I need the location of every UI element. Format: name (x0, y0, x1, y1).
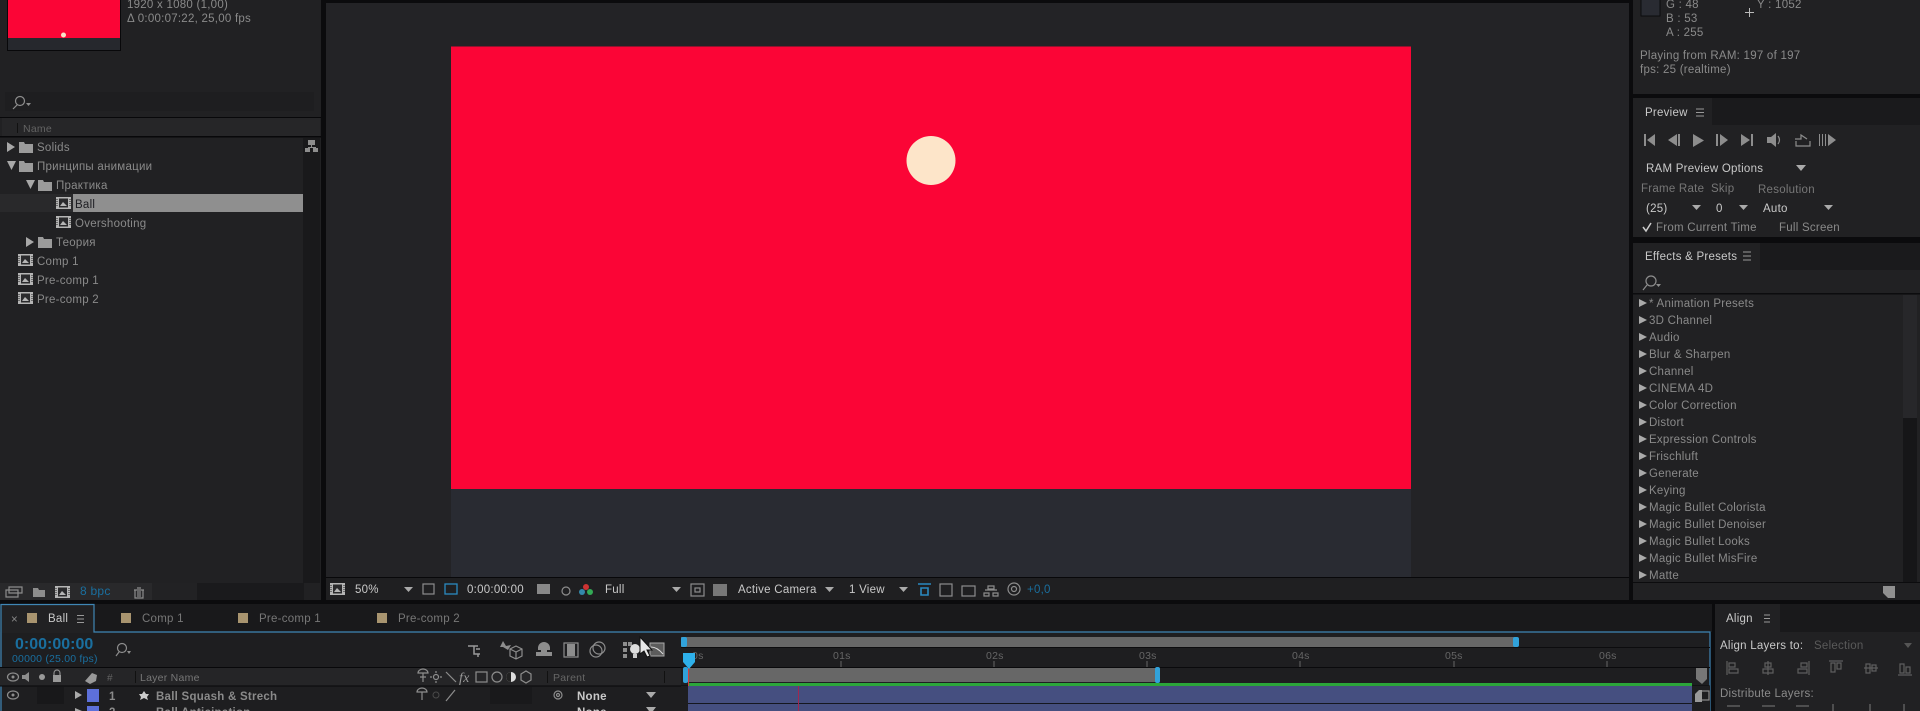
panel: info: B : 53 (1666, 13, 1698, 25)
panel: preview: Frame Rate (1641, 183, 1704, 195)
timeline tab: Ball: Ball (48, 613, 68, 625)
right timeline controls (1695, 668, 1709, 702)
panel: timeline (0, 604, 1712, 711)
panel: project (0, 0, 321, 600)
panel: align (1715, 604, 1920, 711)
layer row 1 (8, 687, 656, 704)
project tree list: Overshooting (75, 218, 146, 230)
layer row 1: Ball Squash & Strech (156, 691, 277, 703)
flowchart icon (305, 140, 318, 152)
layer duration bars (681, 667, 1710, 711)
playback controls (1644, 133, 1836, 147)
effects list: Distort (1649, 417, 1685, 429)
layer row 2 (75, 706, 656, 711)
panel: align: Align Layers to: (1720, 640, 1803, 652)
project tree list: Pre-comp 2 (37, 294, 99, 306)
distribute icons (1727, 704, 1904, 711)
panel: effects and presets (1633, 243, 1920, 600)
panel: preview: (25) (1646, 203, 1667, 215)
panel: align: Distribute Layers: (1720, 688, 1814, 700)
time ruler (681, 647, 1710, 667)
project search box (5, 92, 314, 111)
panel: preview: Preview (1645, 107, 1688, 119)
effects list: Audio (1649, 332, 1680, 344)
panel: preview: Auto (1763, 203, 1788, 215)
time ruler: 03s (1139, 650, 1157, 662)
panel: preview: Resolution (1758, 184, 1815, 196)
effects list (1639, 298, 1766, 582)
effects list: Magic Bullet Looks (1649, 536, 1750, 548)
layer row 1: 1 (109, 691, 116, 703)
effects list: * Animation Presets (1649, 298, 1754, 310)
timeline search (116, 644, 131, 656)
time ruler: 04s (1292, 650, 1310, 662)
project column header: Name (23, 123, 52, 135)
layer header row: fx (459, 671, 470, 686)
project item info (127, 0, 251, 25)
selected row: Ball (0, 194, 303, 212)
timeline tab: Ball (1, 604, 1710, 711)
playhead (683, 653, 695, 669)
mouse cursor (640, 637, 652, 657)
panel: preview: RAM Preview Options (1646, 163, 1763, 175)
panel: preview: 0 (1716, 203, 1723, 215)
layer row 1: None (577, 691, 607, 703)
effects list: Magic Bullet Denoiser (1649, 519, 1766, 531)
effects list: Blur & Sharpen (1649, 349, 1730, 361)
layer header row: Layer Name (140, 672, 200, 684)
layer header row: # (107, 673, 113, 684)
panel: preview: From Current Time (1656, 222, 1757, 234)
effects list: Magic Bullet Colorista (1649, 502, 1766, 514)
effects list: Magic Bullet MisFire (1649, 553, 1758, 565)
current time: 00000 (25.00 fps) (12, 653, 98, 665)
align icons (1727, 661, 1912, 675)
project thumbnail (7, 0, 121, 51)
panel: composition viewer (326, 0, 1629, 600)
comp canvas: red solid (451, 46, 1411, 489)
panel: info: fps: 25 (realtime) (1640, 64, 1731, 76)
layer header row (0, 667, 1710, 686)
effects list: 3D Channel (1649, 315, 1712, 327)
panel: effects and presets: Effects & Presets (1645, 251, 1737, 263)
viewer toolbar: +0,0 (1027, 584, 1051, 596)
time ruler: 06s (1599, 650, 1617, 662)
ball (906, 136, 956, 185)
project item info: Δ 0:00:07:22, 25,00 fps (127, 13, 251, 25)
current time (12, 636, 98, 665)
effects footer (1633, 582, 1920, 598)
project tree list (7, 142, 152, 306)
graph editor icon (650, 643, 664, 656)
project tree list: Практика (56, 180, 108, 192)
selected row: Ball: Ball (75, 199, 95, 211)
effects list: CINEMA 4D (1649, 383, 1713, 395)
project tree list: Pre-comp 1 (37, 275, 99, 287)
viewer toolbar: 50% (355, 584, 379, 596)
current time: 0:00:00:00 (15, 636, 93, 653)
project scrollbar column (303, 138, 320, 583)
project footer: 8 bpc (80, 584, 111, 598)
panel: preview: Skip (1711, 183, 1734, 195)
panel: info: Playing from RAM: 197 of 197 (1640, 50, 1800, 62)
viewer toolbar: Full (605, 584, 625, 596)
panel: align: Selection (1814, 640, 1864, 652)
timeline tabs: others (121, 613, 460, 625)
panel: info (1633, 0, 1920, 94)
effects list: Matte (1649, 570, 1679, 582)
project tree list: Принципы анимации (37, 161, 152, 173)
timeline tabs: others: Comp 1 (142, 613, 184, 625)
time ruler: 02s (986, 650, 1004, 662)
time ruler: 0s (692, 650, 704, 662)
effects list: Generate (1649, 468, 1699, 480)
comp icons (18, 197, 71, 304)
cached frames green line (688, 683, 1692, 686)
timeline tabs: others: Pre-comp 1 (259, 613, 321, 625)
panel: align: Align (1726, 613, 1753, 625)
project footer (0, 583, 304, 600)
project tree list: Теория (56, 237, 96, 249)
work area bar (681, 667, 1710, 683)
effects search (1633, 276, 1920, 294)
timeline tab: Ball: × (11, 614, 18, 626)
effects list: Color Correction (1649, 400, 1737, 412)
viewer toolbar (326, 577, 1629, 600)
project tree list: Comp 1 (37, 256, 79, 268)
panel: info: A : 255 (1666, 27, 1704, 39)
effects list: Expression Controls (1649, 434, 1757, 446)
timeline tabs: others: Pre-comp 2 (398, 613, 460, 625)
effects scrollbar (1903, 295, 1917, 582)
timeline toolbar icons (468, 641, 640, 659)
time navigator bar (681, 637, 1519, 647)
viewer toolbar: 0:00:00:00 (467, 584, 524, 596)
panel: preview (1633, 98, 1920, 237)
panel: preview: Full Screen (1779, 222, 1840, 234)
viewer toolbar: 1 View (849, 584, 885, 596)
project tree list: Solids (37, 142, 70, 154)
viewer toolbar: Active Camera (738, 584, 817, 596)
effects list: Frischluft (1649, 451, 1699, 463)
layer header row: Parent (553, 672, 585, 684)
project column header (0, 117, 321, 138)
time ruler: 05s (1445, 650, 1463, 662)
time ruler: 01s (833, 650, 851, 662)
effects list: Channel (1649, 366, 1694, 378)
effects list: Keying (1649, 485, 1686, 497)
comp canvas: lower grey area (451, 489, 1411, 577)
